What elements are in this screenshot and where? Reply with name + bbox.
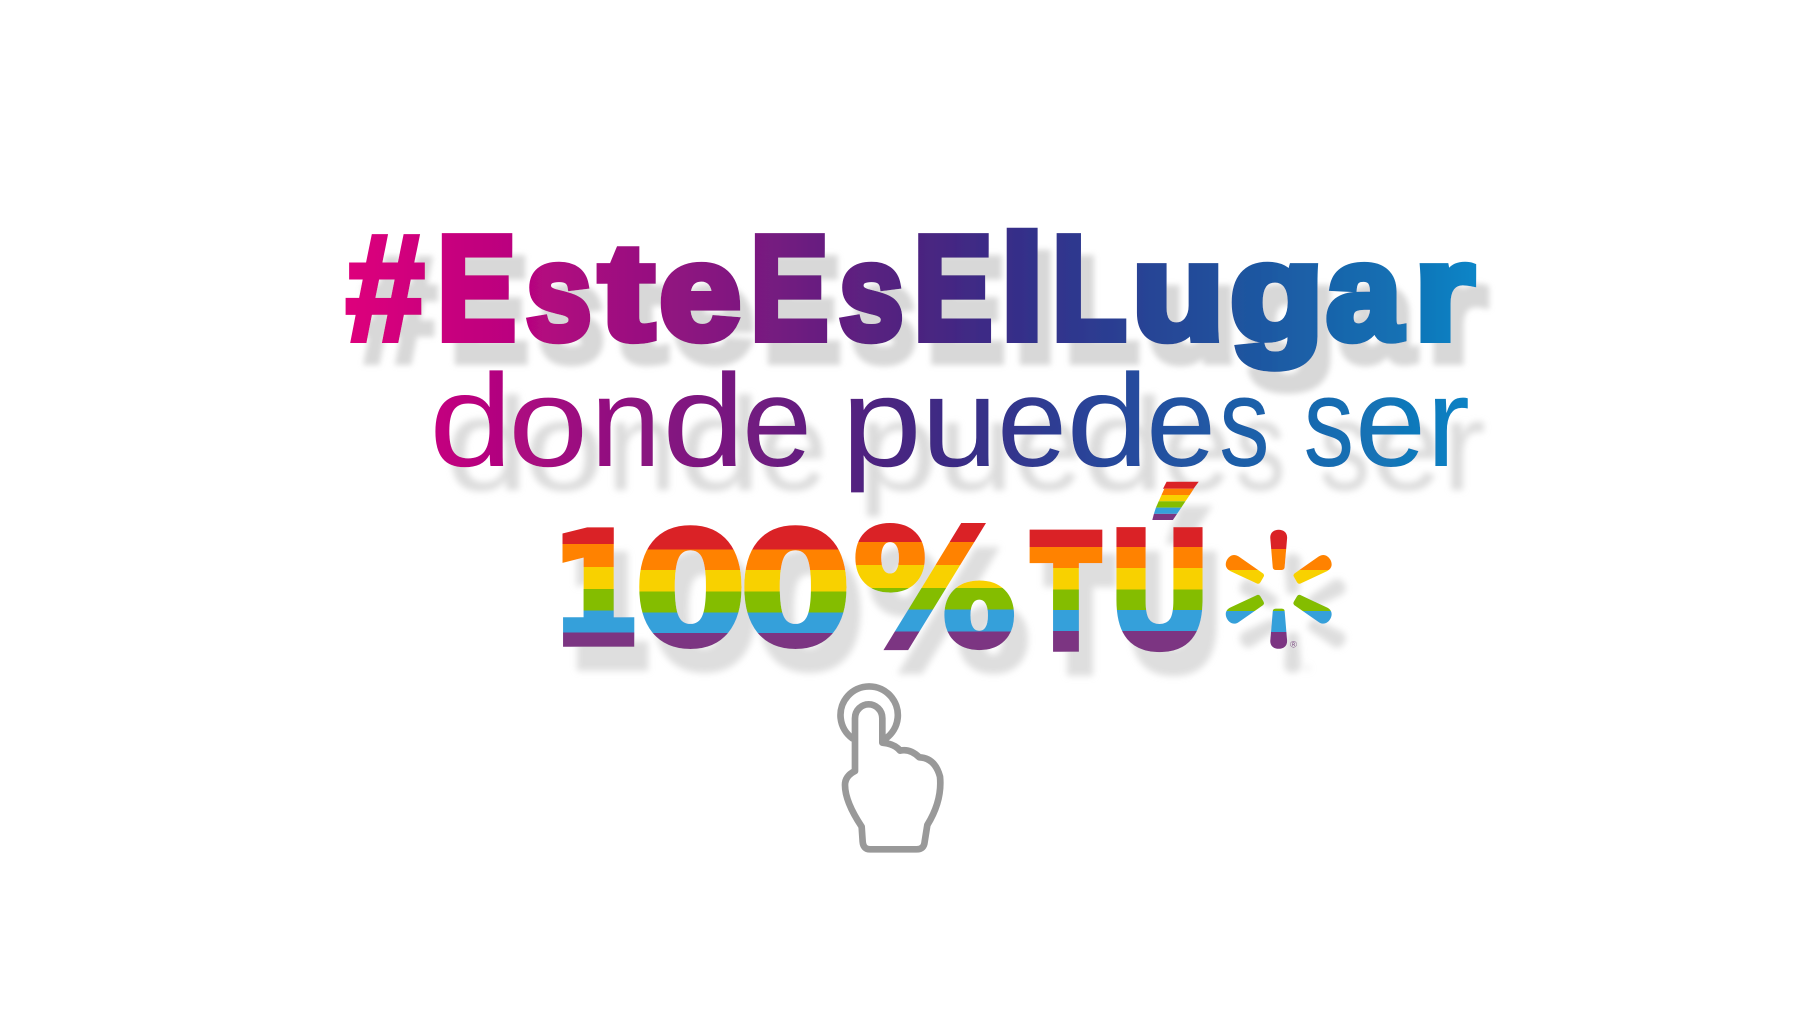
subtitle: donde puedes ser: e: [1355, 351, 1426, 493]
subtitle: donde puedes ser: d: [429, 347, 513, 494]
rainbow headline: 100% TÚ: 1: [553, 504, 639, 678]
accent stripes on the U: [1152, 482, 1199, 520]
title: #EsteEsElLugar: e: [659, 216, 741, 368]
rainbow headline: 100% TÚ: Ú: [1107, 497, 1212, 685]
subtitle: donde puedes ser: e: [1146, 351, 1216, 493]
subtitle: donde puedes ser: e: [742, 351, 812, 493]
subtitle: donde puedes ser: o: [508, 351, 588, 493]
rainbow headline: 100% TÚ: 0: [739, 499, 852, 682]
title: #EsteEsElLugar: #: [346, 203, 424, 372]
subtitle: donde puedes ser: s: [1219, 351, 1270, 493]
subtitle: donde puedes ser: u: [921, 351, 998, 493]
title: #EsteEsElLugar: s: [526, 216, 592, 368]
title: #EsteEsElLugar: s: [839, 216, 904, 368]
title: #EsteEsElLugar: E: [914, 206, 992, 371]
title: #EsteEsElLugar: r: [1414, 216, 1474, 368]
title: #EsteEsElLugar: E: [437, 206, 516, 371]
infographic canvas: [346, 228, 1492, 853]
icon: tapping hand: [840, 686, 940, 849]
subtitle: donde puedes ser: d: [662, 347, 745, 494]
rainbow headline: 100% TÚ: [553, 482, 1212, 685]
title: #EsteEsElLugar: g: [1230, 216, 1324, 368]
subtitle: donde puedes ser: p: [841, 351, 922, 493]
icon: rainbow spark logo: [1220, 525, 1340, 652]
title: #EsteEsElLugar: [346, 203, 1474, 372]
subtitle: donde puedes ser: r: [1426, 351, 1470, 493]
title: #EsteEsElLugar: L: [1052, 206, 1127, 371]
subtitle: donde puedes ser: s: [1304, 351, 1354, 493]
rainbow headline: 100% TÚ: %: [853, 496, 1016, 683]
subtitle: donde puedes ser: d: [1066, 347, 1149, 494]
title: #EsteEsElLugar: u: [1132, 216, 1224, 368]
title: #EsteEsElLugar: E: [750, 206, 829, 371]
title: #EsteEsElLugar: l: [1000, 206, 1045, 371]
rainbow headline: 100% TÚ: T: [1033, 506, 1099, 682]
subtitle: donde puedes ser: [429, 347, 1470, 494]
subtitle: donde puedes ser: n: [590, 351, 661, 493]
registered mark: ®: [1290, 640, 1297, 650]
title: #EsteEsElLugar: t: [599, 216, 654, 368]
rainbow headline: 100% TÚ: 0: [634, 499, 747, 682]
title: #EsteEsElLugar: a: [1326, 216, 1403, 368]
subtitle: donde puedes ser: e: [997, 351, 1067, 493]
